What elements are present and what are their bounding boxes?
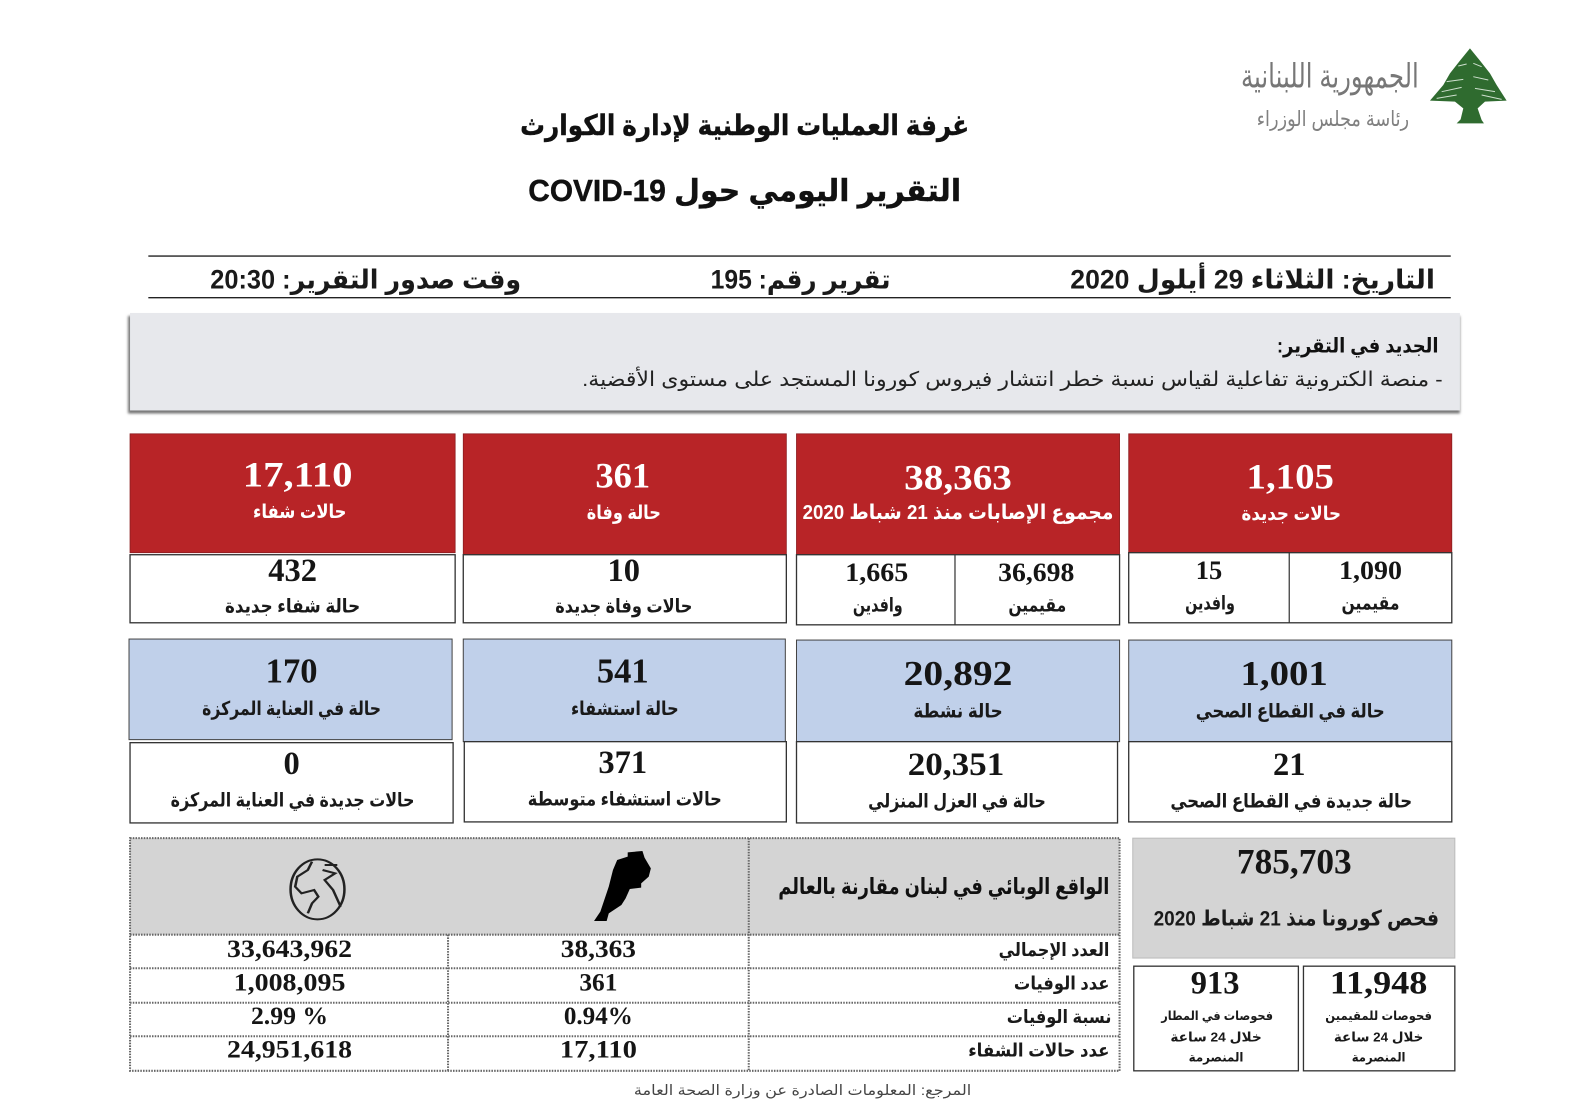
number: airport tests: 913: [1191, 966, 1239, 1002]
icon: globe: [291, 859, 344, 919]
number: residents: 1,090: [1339, 555, 1402, 585]
label: moderate hospitalised: حالات استشفاء متوسطة: [528, 790, 722, 811]
label: airport tests: خلال 24 ساعة: [1170, 1029, 1262, 1044]
number: total infections: 38,363: [904, 458, 1012, 498]
row: recovered: 17,110: [560, 1036, 637, 1064]
text: new platform note: - منصة الكترونية تفاعلية لقياس نسبة خطر انتشار فيروس كورونا المستجد على مستوى الأقضية.: [582, 366, 1443, 391]
logo text: republic name: الجمهورية اللبنانية: [1241, 58, 1419, 96]
number: new ICU: 0: [283, 746, 300, 782]
row: deaths: 361: [579, 969, 617, 997]
panel: deaths: [463, 434, 786, 623]
number: ICU cases: 170: [266, 653, 317, 691]
report number: تقرير رقم: 195: [711, 265, 890, 296]
number: resident tests: 11,948: [1330, 966, 1427, 1002]
number: new recovered: 432: [268, 553, 317, 589]
label: active cases: حالة نشطة: [913, 701, 1003, 722]
row: total: العدد الإجمالي: [999, 939, 1109, 961]
number: recovered total: 17,110: [243, 455, 353, 495]
panel: new cases: [1129, 434, 1452, 623]
label: deaths: حالة وفاة: [587, 503, 661, 524]
label: new health sector: حالة جديدة في القطاع الصحي: [1170, 792, 1412, 813]
label: tests since 21 February 2020: فحص كورونا منذ 21 شباط 2020: [1154, 907, 1439, 931]
panel: what's new in the report: [128, 313, 1460, 414]
label: arrivals: وافدين: [853, 596, 903, 617]
number: new cases: 1,105: [1247, 457, 1334, 497]
label: resident tests: المنصرمة: [1352, 1051, 1406, 1065]
label: resident tests: [1325, 1009, 1432, 1065]
label: total since 21 February 2020: مجموع الإصابات منذ 21 شباط 2020: [803, 502, 1113, 524]
label: health sector: حالة في القطاع الصحي: [1196, 701, 1385, 722]
panel: total infections: [796, 434, 1120, 625]
label: arrivals: وافدين: [1185, 594, 1235, 615]
label: new recovered: حالة شفاء جديدة: [225, 597, 360, 618]
logo text: council of ministers: رئاسة مجلس الوزراء: [1257, 107, 1409, 131]
number: home isolation: 20,351: [908, 747, 1004, 783]
row: deaths: [234, 969, 1109, 997]
label: new ICU: حالات جديدة في العناية المركزة: [171, 791, 415, 812]
logo: Lebanese Republic Presidency of the Council of Ministers: [1241, 48, 1507, 131]
number: arrivals: 1,665: [845, 557, 908, 587]
number: new health sector: 21: [1273, 747, 1305, 783]
icon: cedar tree: [1430, 48, 1507, 123]
number: active cases: 20,892: [904, 655, 1012, 693]
subtitle: daily report on COVID-19: التقرير اليومي حول COVID-19: [528, 174, 961, 209]
label: residents: مقيمين: [1342, 594, 1399, 615]
label: airport tests: [1160, 1009, 1273, 1065]
label: hospitalised: حالة استشفاء: [571, 699, 679, 720]
panel: intensive care: [129, 639, 453, 823]
number: residents: 36,698: [998, 557, 1074, 587]
report info bar: [148, 256, 1451, 298]
report time: وقت صدور التقرير: 20:30: [210, 265, 521, 296]
row: recovered: عدد حالات الشفاء: [968, 1040, 1109, 1061]
panel: hospitalised: [463, 639, 786, 822]
label: home isolation: حالة في العزل المنزلي: [868, 792, 1046, 813]
row: death rate: نسبة الوفيات: [1007, 1006, 1111, 1028]
label: new cases: حالات جديدة: [1241, 504, 1341, 525]
heading: epidemic situation in Lebanon vs world: الواقع الوبائي في لبنان مقارنة بالعالم: [778, 874, 1109, 900]
number: moderate hospitalised: 371: [598, 745, 647, 781]
number: health sector: 1,001: [1240, 655, 1328, 693]
row: death rate: [251, 1002, 1111, 1030]
panel: resident tests: [1303, 966, 1455, 1071]
table: Lebanon compared with the world: [130, 838, 1120, 1071]
row: death rate: 0.94%: [564, 1002, 633, 1030]
label: ICU cases: حالة في العناية المركزة: [202, 699, 381, 720]
label: airport tests: المنصرمة: [1189, 1051, 1244, 1065]
panel: recovered cases: [130, 434, 455, 623]
row: total: 38,363: [561, 935, 636, 963]
panel: health sector: [1129, 640, 1452, 822]
icon: Lebanon map: [594, 851, 651, 921]
panel: airport tests: [1134, 966, 1298, 1071]
row: recovered: 24,951,618: [227, 1036, 352, 1064]
label: recovered cases: حالات شفاء: [253, 502, 346, 523]
row: deaths: عدد الوفيات: [1014, 973, 1109, 995]
number: hospitalised: 541: [597, 653, 649, 691]
panel: active cases: [796, 640, 1120, 823]
row: deaths: 1,008,095: [234, 969, 345, 997]
number: total deaths: 361: [595, 456, 650, 496]
panel: total PCR tests: [1133, 838, 1455, 958]
row: total: 33,643,962: [227, 935, 352, 963]
label: resident tests: فحوصات للمقيمين: [1325, 1009, 1432, 1023]
title: national operations room: غرفة العمليات الوطنية لإدارة الكوارث: [520, 110, 969, 142]
row: death rate: 2.99 %: [251, 1002, 328, 1030]
row: recovered: [227, 1036, 1109, 1064]
source note: المرجع: المعلومات الصادرة عن وزارة الصحة العامة: [634, 1083, 971, 1099]
row: total: [227, 935, 1109, 963]
number: total tests: 785,703: [1237, 842, 1352, 882]
label: residents: مقيمين: [1008, 596, 1066, 617]
label: new deaths: حالات وفاة جديدة: [555, 597, 692, 618]
report date: التاريخ: الثلاثاء 29 أيلول 2020: [1070, 263, 1435, 296]
number: new deaths: 10: [608, 553, 640, 589]
label: resident tests: خلال 24 ساعة: [1334, 1029, 1423, 1044]
heading: new in report: الجديد في التقرير:: [1277, 336, 1439, 359]
label: airport tests: فحوصات في المطار: [1160, 1009, 1273, 1023]
number: arrivals: 15: [1196, 555, 1222, 585]
